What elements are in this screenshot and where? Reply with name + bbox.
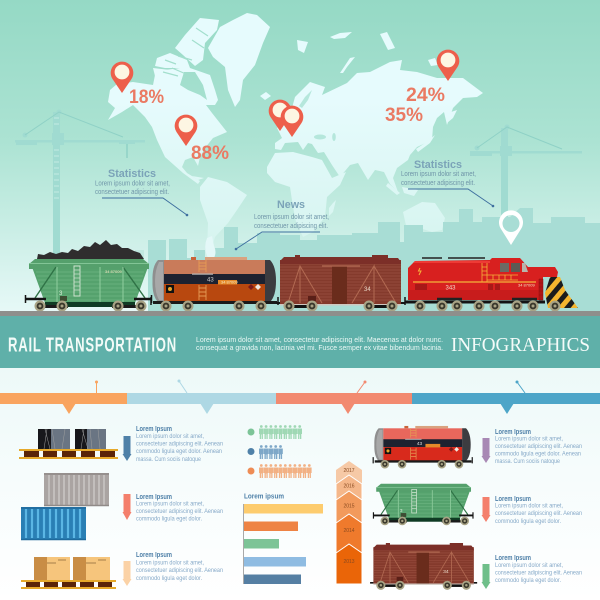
pallet with cardboard boxes <box>21 557 116 589</box>
box wagon <box>276 255 405 312</box>
text block: right 1 <box>495 427 582 465</box>
title: RAIL TRANSPORTATION <box>8 334 177 356</box>
bar chart <box>243 492 323 584</box>
callout: news: News <box>277 199 305 211</box>
smoke <box>205 236 216 258</box>
text block: right 3: consectetuer adipiscing elit. Aenean <box>495 570 582 576</box>
band paragraph <box>196 335 443 352</box>
text block: left 3: consectetuer adipiscing elit. Aenean <box>136 567 223 574</box>
band paragraph: consequat a gravida non, lacinia vel mi. Fusce semper ex vitae bibendum lacinia. <box>196 343 443 352</box>
callout: left statistics <box>95 168 188 216</box>
text block: left 3 <box>136 550 223 582</box>
text block: right 2: Lorem Ipsum <box>495 494 531 503</box>
text block: left 2: consectetuer adipiscing elit. Aenean <box>136 508 223 515</box>
locomotive: 34 87009 <box>518 282 535 288</box>
small hopper wagon <box>373 484 473 525</box>
text block: right 1: Lorem ipsum dolor sit amet, <box>495 436 563 442</box>
callout: left statistics: consectetuer adipiscing elit. <box>95 189 169 196</box>
timeline bar <box>0 380 600 414</box>
bar chart: Lorem ipsum <box>244 492 284 500</box>
text block: left 1: massa. Cum sociis natoque <box>136 456 201 463</box>
text block: right 3: commodo ligula eget dolor. <box>495 577 561 584</box>
text block: left 2: commodo ligula eget dolor. <box>136 516 202 522</box>
Greenland <box>208 13 270 107</box>
pin: Alaska <box>111 62 133 93</box>
Eurasia <box>275 60 483 192</box>
text block: right 2: commodo ligula eget dolor. <box>495 518 561 525</box>
text block: right 2: consectetuer adipiscing elit. Aenean <box>495 510 582 517</box>
callout: right statistics: consectetuer adipiscing elit. <box>401 180 475 187</box>
text block: left 1: Lorem Ipsum <box>136 424 172 433</box>
Arctic Canada <box>153 18 219 77</box>
year arrow stack <box>336 461 362 584</box>
islands <box>192 32 457 216</box>
tank wagon: 34 87009 <box>221 280 238 284</box>
callout: right statistics <box>401 159 494 207</box>
pin: Europe back <box>269 100 291 131</box>
percentage 35%: 35% <box>385 105 423 126</box>
hopper wagon with coal: 3 <box>59 291 63 297</box>
locomotive <box>405 258 578 312</box>
building behind coal <box>135 250 144 260</box>
pin: white outline <box>499 210 523 245</box>
text block: right 3: Lorem ipsum dolor sit amet, <box>495 562 563 569</box>
pin: Europe front <box>281 106 303 137</box>
text block: left 3: Lorem ipsum dolor sit amet, <box>136 560 204 566</box>
box wagon: 34 <box>364 287 371 293</box>
callout: left statistics: Statistics <box>108 168 156 180</box>
tank wagon: 43 <box>207 278 214 284</box>
rail track <box>0 311 600 316</box>
text block: left 2 <box>136 492 223 522</box>
title band <box>0 316 600 368</box>
world map <box>108 13 483 252</box>
text block: left 1: consectetuer adipiscing elit. Aenean <box>136 440 223 448</box>
New Zealand <box>460 230 471 243</box>
hopper wagon with coal: 34 87009 <box>105 269 122 274</box>
text block: left 3: Lorem Ipsum <box>136 550 172 559</box>
year arrow stack: 2015 <box>343 504 355 510</box>
crane: right <box>470 124 582 218</box>
callout: left statistics: Lorem ipsum dolor sit amet, <box>95 180 170 188</box>
Africa <box>267 152 346 237</box>
callout: news <box>235 199 329 250</box>
arctic channels <box>163 28 208 76</box>
callout: news: Lorem ipsum dolor sit amet, <box>254 214 329 221</box>
pin: USA <box>175 115 197 146</box>
small hopper wagon: 3 <box>400 508 403 514</box>
text block: left 1: commodo ligula eget dolor. Aenean <box>136 448 222 455</box>
hopper wagon with coal <box>26 240 152 312</box>
arrow: salmon <box>122 494 132 520</box>
callout: news: consectetuer adipiscing elit. <box>254 223 328 230</box>
text block: right 1: massa. Cum sociis natoque <box>495 458 560 465</box>
arrow: green <box>482 564 490 589</box>
tank wagon <box>151 257 278 312</box>
text block: right 1: consectetuer adipiscing elit. Aenean <box>495 443 582 450</box>
text block: right 2 <box>495 494 582 525</box>
text block: left 3: commodo ligula eget dolor. <box>136 575 202 582</box>
South America <box>200 177 247 252</box>
callout: right statistics: Statistics <box>414 159 462 171</box>
text block: right 3 <box>495 553 582 584</box>
people chart <box>248 425 312 478</box>
year arrow stack: 2017 <box>343 468 355 474</box>
arrow: salmon right <box>482 497 490 522</box>
year arrow stack: 2014 <box>343 528 355 534</box>
locomotive: 343 <box>446 286 456 292</box>
small red tank wagon: 43 <box>417 441 422 446</box>
inland water <box>299 90 336 141</box>
text block: right 1: Lorem Ipsum <box>495 427 531 436</box>
arrow: blue <box>122 436 132 461</box>
arrow: peach <box>122 561 132 586</box>
text block: left 2: Lorem ipsum dolor sit amet, <box>136 500 204 508</box>
text block: right 1: commodo ligula eget dolor. Aenean <box>495 450 581 458</box>
percentage 18%: 18% <box>129 87 164 108</box>
pin: Russia <box>437 50 459 81</box>
arrow: purple <box>482 438 490 463</box>
city skyline <box>148 208 600 311</box>
small box wagon: 34 <box>443 569 449 575</box>
Australia <box>403 202 445 232</box>
text block: left 2: Lorem Ipsum <box>136 492 172 501</box>
year arrow stack: 2013 <box>343 559 355 565</box>
small red tank wagon <box>373 426 472 468</box>
text block: right 2: Lorem ipsum dolor sit amet, <box>495 502 563 510</box>
sky background <box>0 0 600 316</box>
text block: right 3: Lorem Ipsum <box>495 553 531 562</box>
lower background <box>0 368 600 600</box>
North America <box>108 68 227 184</box>
text block: left 1 <box>136 424 223 463</box>
band paragraph: Lorem ipsum dolor sit amet, consectetur adipiscing elit. Maecenas at dolor nunc. <box>196 335 443 344</box>
infographics heading: INFOGRAPHICS <box>451 334 590 356</box>
text block: left 1: Lorem ipsum dolor sit amet, <box>136 433 204 440</box>
pallet with black packages <box>19 429 118 459</box>
blue shipping container <box>21 507 86 540</box>
crane: left <box>15 110 145 258</box>
callout: right statistics: Lorem ipsum dolor sit amet, <box>401 171 476 178</box>
year arrow stack: 2016 <box>343 484 355 490</box>
percentage 88%: 88% <box>191 143 229 164</box>
grey shipping container <box>44 473 109 506</box>
small box wagon <box>370 543 477 590</box>
percentage 24%: 24% <box>406 85 445 106</box>
